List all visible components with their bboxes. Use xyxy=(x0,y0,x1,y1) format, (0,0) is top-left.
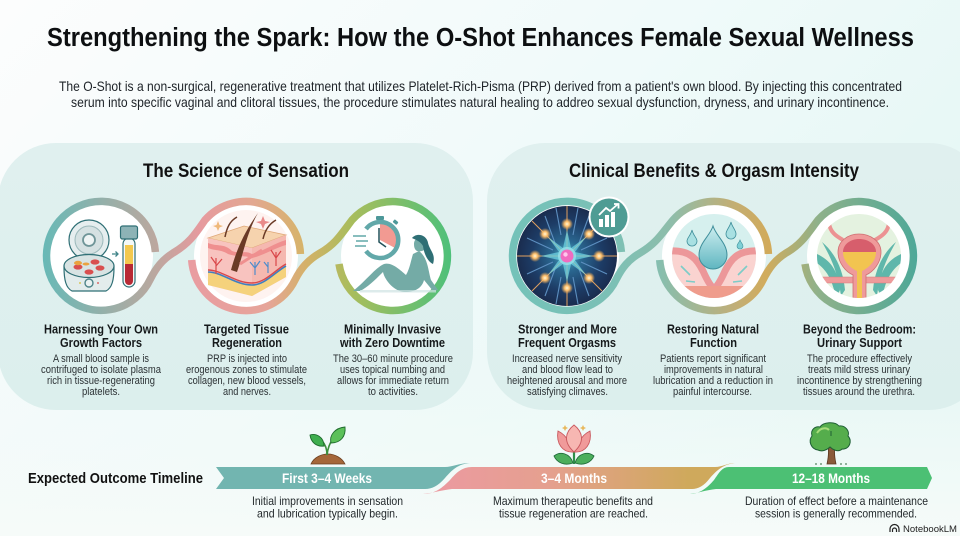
card: restoring natural function: lubrication and a reduction in xyxy=(653,375,773,387)
card: minimally invasive with zero downtime: The 30–60 minute procedure xyxy=(333,353,453,365)
title: Strengthening the Spark: How the O-Shot Enhances Female Sexual Wellness xyxy=(47,24,914,52)
icon: flower xyxy=(554,425,594,464)
label: first 3-4 weeks: First 3–4 Weeks xyxy=(282,471,372,486)
description: 12-18 months: Duration of effect before a maintenance xyxy=(745,495,928,508)
card: harnessing your own growth factors: Growth Factors xyxy=(60,336,142,350)
connector ring: orgasms to function xyxy=(513,201,768,310)
label: 3-4 months: 3–4 Months xyxy=(541,471,607,486)
card: targeted tissue regeneration: erogenous zones to stimulate xyxy=(186,364,307,376)
card: restoring natural function: Restoring Natural xyxy=(667,322,759,336)
card: beyond the bedroom urinary support: Urinary Support xyxy=(817,336,903,350)
icon: glowing nerve cell xyxy=(517,206,617,306)
icon: growth chart badge xyxy=(588,196,630,238)
card: minimally invasive with zero downtime: uses topical numbing and xyxy=(340,364,445,376)
icon: water drop and tissue xyxy=(670,214,758,302)
icon: skin tissue block xyxy=(200,210,292,302)
description: first 3-4 weeks: Initial improvements in sensation xyxy=(252,495,403,508)
card: targeted tissue regeneration: PRP is injected into xyxy=(207,353,287,365)
icon: tree xyxy=(810,423,850,464)
description: 3-4 months xyxy=(493,495,653,520)
timeline heading: Expected Outcome Timeline xyxy=(28,470,203,487)
icon: stopwatch and reclining woman xyxy=(353,216,438,292)
timeline stage: 3-4 months xyxy=(423,425,735,520)
heading: science of sensation: The Science of Sensation xyxy=(143,161,349,182)
card: minimally invasive with zero downtime xyxy=(333,322,453,398)
card: stronger and more frequent orgasms: Stronger and More xyxy=(518,322,617,336)
icon: bladder and urethra xyxy=(817,214,901,300)
card: harnessing your own growth factors xyxy=(41,322,162,398)
brand: notebooklm logo: NotebookLM xyxy=(903,524,957,535)
card: stronger and more frequent orgasms xyxy=(507,322,627,398)
card: stronger and more frequent orgasms: Frequent Orgasms xyxy=(518,336,616,350)
card: restoring natural function: painful intercourse. xyxy=(673,386,752,398)
intro text xyxy=(59,78,902,110)
card: stronger and more frequent orgasms: and blood flow lead to xyxy=(522,364,613,376)
connector ring: tissue to downtime xyxy=(192,202,447,311)
arrow band: green xyxy=(690,467,932,494)
arrow band: pink to gold xyxy=(423,463,735,494)
description: first 3-4 weeks xyxy=(252,495,403,520)
card: harnessing your own growth factors: rich in tissue-regenerating xyxy=(47,375,155,387)
card: harnessing your own growth factors: Harnessing Your Own xyxy=(44,322,158,336)
card: beyond the bedroom urinary support: tissues around the urethra. xyxy=(803,386,915,398)
card: minimally invasive with zero downtime: with Zero Downtime xyxy=(339,336,445,350)
card: restoring natural function: Function xyxy=(690,336,737,350)
card: restoring natural function: Patients report significant xyxy=(660,353,766,365)
timeline stage: 12-18 months xyxy=(690,423,932,520)
icon: centrifuge and blood tube xyxy=(64,220,138,291)
icon: sprout xyxy=(310,427,345,464)
card: targeted tissue regeneration: and nerves. xyxy=(223,386,271,398)
description: first 3-4 weeks: and lubrication typically begin. xyxy=(257,508,398,520)
card: beyond the bedroom urinary support: incontinence by strengthening xyxy=(797,375,922,387)
description: 12-18 months xyxy=(745,495,928,520)
description: 12-18 months: session is generally recommended. xyxy=(755,508,917,520)
panel: the science of sensation xyxy=(0,143,473,410)
card: harnessing your own growth factors: contrifuged to isolate plasma xyxy=(41,364,162,376)
card: minimally invasive with zero downtime: allows for immediate return xyxy=(337,375,449,387)
connector ring: growth factors to tissue xyxy=(47,201,300,310)
card: targeted tissue regeneration: Regeneration xyxy=(212,336,282,350)
arrow band: teal xyxy=(216,463,470,489)
card: harnessing your own growth factors: platelets. xyxy=(82,386,120,398)
card: beyond the bedroom urinary support: treats mild stress urinary xyxy=(808,364,910,376)
card: restoring natural function: improvements in natural xyxy=(664,364,763,376)
description: 3-4 months: Maximum therapeutic benefits and xyxy=(493,495,653,508)
card: beyond the bedroom urinary support: The procedure effectively xyxy=(807,353,912,365)
card: minimally invasive with zero downtime: Minimally Invasive xyxy=(344,322,441,336)
card: harnessing your own growth factors: A small blood sample is xyxy=(53,353,149,365)
timeline stage: first 3-4 weeks xyxy=(216,427,470,520)
card: beyond the bedroom urinary support: Beyond the Bedroom: xyxy=(803,322,916,336)
label: 12-18 months: 12–18 Months xyxy=(792,471,870,486)
card: targeted tissue regeneration xyxy=(186,322,307,398)
card: beyond the bedroom urinary support xyxy=(797,322,922,398)
card: targeted tissue regeneration: Targeted Tissue xyxy=(204,322,289,336)
panel: clinical benefits and orgasm intensity xyxy=(487,143,960,410)
card: restoring natural function xyxy=(653,322,773,398)
connector ring: function to urinary support xyxy=(660,202,913,311)
card: stronger and more frequent orgasms: Increased nerve sensitivity xyxy=(512,353,622,365)
card: minimally invasive with zero downtime: to activities. xyxy=(368,386,418,398)
card: targeted tissue regeneration: collagen, new blood vessels, xyxy=(188,375,306,387)
card: stronger and more frequent orgasms: satisfying climaves. xyxy=(527,386,608,398)
card: stronger and more frequent orgasms: heightened arousal and more xyxy=(507,375,627,387)
heading: clinical benefits: Clinical Benefits & Orgasm Intensity xyxy=(569,161,859,182)
description: 3-4 months: tissue regeneration are reached. xyxy=(499,508,648,520)
